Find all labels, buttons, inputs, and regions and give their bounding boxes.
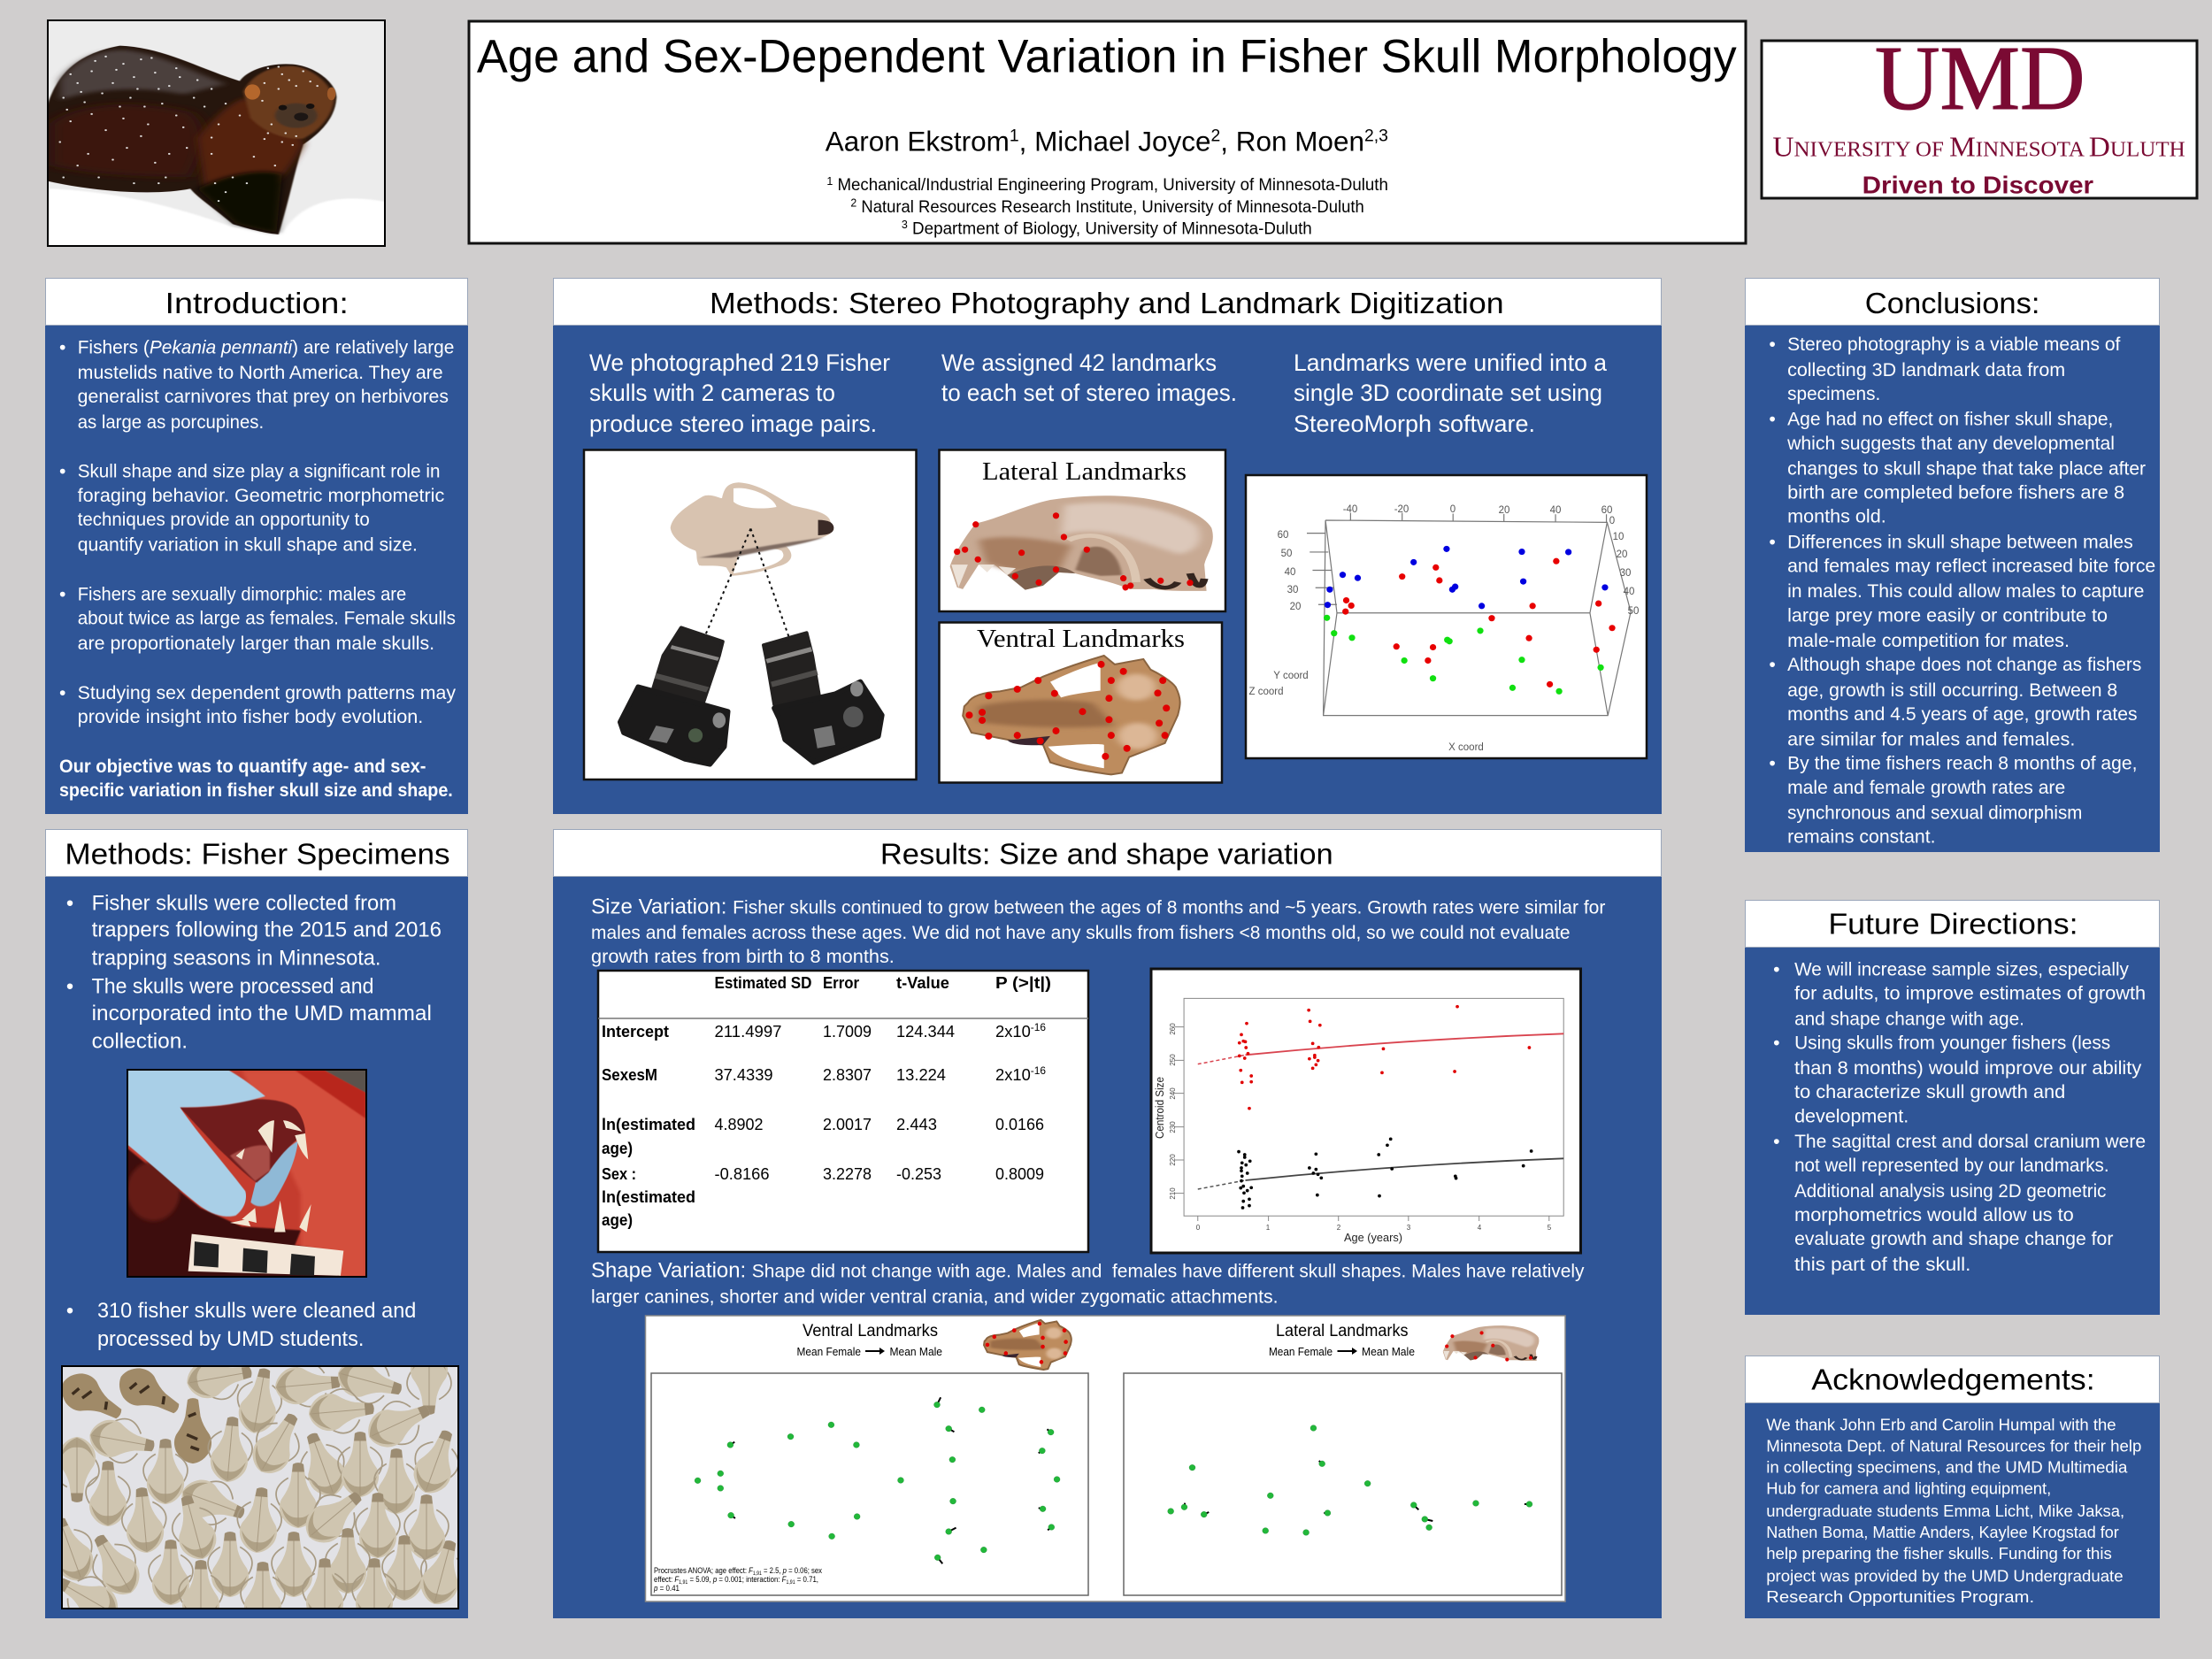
text block: introduction bullets: Our objective was to quantify age- and sex- (59, 757, 426, 777)
chart: 3D landmark coordinates: Z coord (1249, 687, 1283, 697)
chart: 3D landmark coordinates: 40 (1624, 587, 1634, 597)
photo: gloved hand holding fisher jaw (127, 1069, 367, 1279)
table: model coefficients: ln(estimated (602, 1187, 695, 1206)
logo: UMD: Driven to Discover (1863, 171, 2093, 198)
table: model coefficients: Sex : (602, 1164, 636, 1183)
panel: Conclusions (1745, 278, 2160, 852)
chart: 3D landmark coordinates (1246, 475, 1647, 758)
text block: Procrustes ANOVA: 1,91 (679, 1580, 688, 1586)
heading: Methods Fisher Specimens: Methods: Fisher Specimens (65, 839, 450, 872)
table: model coefficients: age) (602, 1139, 633, 1157)
table: model coefficients (598, 971, 1088, 1252)
affiliations: Natural Resources Research Institute, University of Minnesota-Duluth (856, 198, 1364, 217)
chart: 3D landmark coordinates: -40 (1343, 504, 1357, 515)
text block: Procrustes ANOVA: effect: F (654, 1575, 680, 1584)
chart: 3D landmark coordinates: 20 (1617, 549, 1627, 560)
text block: Procrustes ANOVA: p = 0.001; interaction: F (713, 1575, 789, 1584)
authors: 1 (1010, 127, 1019, 145)
legend: ventral mean female to mean male: Mean Female (796, 1345, 861, 1358)
chart: 3D landmark coordinates: 30 (1620, 568, 1631, 579)
panel: Methods Stereo Photography (553, 278, 1662, 814)
heading: Introduction: Introduction: (165, 288, 349, 320)
text block: future directions bullets: for adults, to improve estimates of growth (1794, 984, 2146, 1004)
text block: future directions bullets: • (1773, 960, 1780, 980)
table: model coefficients: 2x10 (995, 1065, 1031, 1084)
chart: 3D landmark coordinates: 60 (1278, 530, 1288, 541)
text block: specimen bullets: 310 fisher skulls were cleaned and (97, 1299, 416, 1322)
text block: step three: Landmarks were unified into a (1294, 349, 1607, 376)
logo: UMD: UNIVERSITY OF MINNESOTA DULUTH (1772, 132, 2185, 163)
image: ventral landmarks: Ventral Landmarks (977, 625, 1185, 653)
icon: small lateral skull (1443, 1325, 1539, 1362)
text block: step three (1294, 349, 1607, 437)
chart: 3D landmark coordinates: 30 (1287, 585, 1298, 595)
text block: size variation (591, 895, 1605, 967)
text block: acknowledgements: Hub for camera and lighting equipment, (1766, 1479, 2051, 1497)
text block: future directions bullets: to characterize skull growth and (1794, 1082, 2065, 1102)
text block: introduction bullets: mustelids native to North America. They are (78, 363, 443, 383)
panel: Acknowledgements (1745, 1356, 2160, 1618)
text block: conclusions bullets: • (1769, 334, 1776, 355)
text block: specimen bullets: Fisher skulls were collected from (92, 891, 396, 914)
table: model coefficients: 4.8902 (715, 1115, 763, 1133)
chart: 3D landmark coordinates: 0 (1450, 504, 1455, 515)
affiliations: Mechanical/Industrial Engineering Program, University of Minnesota-Duluth (833, 176, 1388, 195)
text block: size variation: males and females across these ages. We did not have any skulls from fishers <8 months old, so we could not evaluate (591, 923, 1571, 943)
text block: conclusions bullets: • (1769, 532, 1776, 552)
figure: mean shape comparison (646, 1316, 1565, 1601)
text block: conclusions bullets: Differences in skull shape between males (1787, 532, 2133, 552)
chart: centroid size by age (1151, 969, 1580, 1253)
text block: conclusions bullets: Stereo photography is a viable means of (1787, 334, 2120, 355)
plot: lateral landmark shifts (1124, 1373, 1562, 1595)
text block: step one: We photographed 219 Fisher (589, 349, 890, 376)
chart: 3D landmark coordinates: 50 (1628, 606, 1639, 617)
text block: introduction bullets: are proportionately larger than male skulls. (78, 634, 434, 654)
legend: lateral mean female to mean male: Mean Female (1269, 1345, 1333, 1358)
text block: introduction bullets: quantify variation in skull shape and size. (78, 535, 418, 556)
table: model coefficients: -16 (1031, 1064, 1046, 1077)
text block: step two (941, 349, 1237, 406)
text block: introduction bullets: provide insight into fisher body evolution. (78, 707, 423, 727)
table: model coefficients: Estimated SD (715, 973, 812, 992)
text block: conclusions bullets: age, growth is still occurring. Between 8 (1787, 680, 2117, 701)
text block: conclusions bullets: birth are completed before fishers are 8 (1787, 483, 2124, 503)
text block: acknowledgements: Nathen Boma, Mattie Anders, Kaylee Krogstad for (1766, 1523, 2119, 1541)
chart: 3D landmark coordinates: 50 (1281, 549, 1292, 559)
chart: centroid size by age: 220 (1169, 1154, 1177, 1166)
table: model coefficients: 211.4997 (715, 1022, 782, 1041)
text block: Procrustes ANOVA: Procrustes ANOVA; age effect: F (654, 1566, 763, 1575)
text block: conclusions bullets (1769, 334, 2155, 848)
table: model coefficients: 3.2278 (823, 1164, 872, 1183)
text block: acknowledgements: We thank John Erb and Carolin Humpal with the (1766, 1416, 2116, 1434)
chart: centroid size by age: Age (years) (1344, 1231, 1402, 1244)
table: model coefficients: 124.344 (896, 1022, 955, 1041)
legend: lateral mean female to mean male (1269, 1345, 1415, 1358)
text block: acknowledgements: Minnesota Dept. of Natural Resources for their help (1766, 1437, 2141, 1455)
text block: acknowledgements: Research Opportunities Program. (1766, 1587, 2034, 1606)
table: model coefficients: 1.7009 (823, 1022, 872, 1041)
text block: future directions bullets: The sagittal crest and dorsal cranium were (1794, 1132, 2146, 1152)
table: model coefficients: -16 (1031, 1021, 1046, 1033)
text block: future directions bullets: not well represented by our landmarks. (1794, 1156, 2109, 1176)
title: Age and Sex-Dependent Variation in Fisher Skull Morphology (477, 30, 1737, 82)
chart: 3D landmark coordinates: 10 (1613, 532, 1624, 542)
chart: 3D landmark coordinates: Y coord (1273, 671, 1309, 681)
authors: Aaron Ekstrom (826, 127, 1007, 157)
text block: acknowledgements: help preparing the fisher skulls. Funding for this (1766, 1544, 2112, 1563)
text block: conclusions bullets: months and 4.5 years of age, growth rates (1787, 704, 2138, 725)
chart: 3D landmark coordinates: 40 (1285, 567, 1295, 578)
text block: conclusions bullets: months old. (1787, 507, 1886, 527)
text block: shape variation: Shape Variation: Shape did not change with age. Males and females have different skull shapes. Males have relatively (591, 1259, 1585, 1283)
table: model coefficients: 0.0166 (995, 1115, 1044, 1133)
text block: introduction bullets: • (59, 337, 65, 357)
legend: ventral mean female to mean male: Mean Male (890, 1345, 942, 1358)
affiliations: 3 (902, 218, 908, 231)
table: model coefficients: SexesM (602, 1065, 657, 1084)
text block: specimen bullets: incorporated into the UMD mammal (92, 1002, 432, 1025)
legend: ventral mean female to mean male (796, 1345, 942, 1358)
text block: Procrustes ANOVA (653, 1566, 822, 1593)
chart: centroid size by age: 230 (1169, 1121, 1177, 1133)
text block: introduction bullets: • (59, 462, 65, 482)
logo: UMD: UMD (1875, 28, 2085, 129)
authors: 2,3 (1364, 127, 1388, 145)
text block: conclusions bullets: By the time fishers reach 8 months of age, (1787, 754, 2138, 774)
text block: conclusions bullets: • (1769, 655, 1776, 675)
text block: step two: We assigned 42 landmarks (941, 349, 1217, 376)
text block: Procrustes ANOVA: 1,91 (753, 1571, 762, 1577)
table: model coefficients: 37.4339 (715, 1065, 773, 1084)
icon: small ventral skull (984, 1320, 1071, 1370)
heading: Future Directions: Future Directions: (1828, 908, 2078, 941)
affiliations: Department of Biology, University of Minnesota-Duluth (908, 219, 1312, 238)
text block: introduction bullets: • (59, 584, 65, 604)
authors: 2 (1210, 127, 1220, 145)
image: ventral landmarks (940, 623, 1222, 782)
heading: Results: Results: Size and shape variation (880, 839, 1333, 872)
chart: centroid size by age: 2 (1337, 1224, 1341, 1232)
text block: Procrustes ANOVA: 1,91 (786, 1580, 795, 1586)
chart: 3D landmark coordinates: -20 (1394, 504, 1409, 515)
panel: Future Directions (1745, 901, 2160, 1315)
text block: future directions bullets: Using skulls from younger fishers (less (1794, 1033, 2110, 1053)
text block: introduction bullets: generalist carnivores that prey on herbivores (78, 387, 449, 407)
text block: specimen bullets (66, 891, 442, 1350)
text block: introduction bullets: Skull shape and size play a significant role in (78, 462, 440, 482)
affiliations (826, 174, 1388, 238)
text block: conclusions bullets: and females may reflect increased bite force (1787, 557, 2155, 577)
chart: centroid size by age: 0 (1196, 1224, 1201, 1232)
chart: 3D landmark coordinates: 20 (1290, 602, 1301, 612)
table: model coefficients: t-Value (896, 973, 949, 992)
heading: Acknowledgements: Acknowledgements: (1811, 1363, 2095, 1396)
table: model coefficients: Intercept (602, 1022, 669, 1041)
text block: conclusions bullets: collecting 3D landmark data from (1787, 360, 2065, 380)
table: model coefficients: 0.8009 (995, 1164, 1044, 1183)
image: lateral landmarks: Lateral Landmarks (982, 457, 1187, 486)
table: model coefficients: ln(estimated (602, 1115, 695, 1133)
text block: conclusions bullets: in males. This could allow males to capture (1787, 581, 2144, 602)
table: model coefficients: 2.8307 (823, 1065, 872, 1084)
text block: introduction bullets: techniques provide an opportunity to (78, 510, 370, 530)
table: model coefficients: 13.224 (896, 1065, 946, 1084)
text block: Procrustes ANOVA: = 0.71, (795, 1575, 818, 1584)
text block: specimen bullets: collection. (92, 1030, 188, 1053)
chart: 3D landmark coordinates: 40 (1550, 505, 1561, 516)
text block: introduction bullets: Studying sex dependent growth patterns may (78, 683, 456, 703)
text block: future directions bullets: evaluate growth and shape change for (1794, 1229, 2113, 1249)
heading: lateral landmarks: Lateral Landmarks (1276, 1322, 1409, 1340)
chart: 3D landmark coordinates: 60 (1601, 505, 1612, 516)
panel: Results (553, 830, 1662, 1618)
text block: conclusions bullets: changes to skull shape that take place after (1787, 459, 2146, 480)
table: model coefficients: -0.253 (896, 1164, 941, 1183)
chart: centroid size by age: 210 (1169, 1187, 1177, 1200)
table: model coefficients: 2.443 (896, 1115, 937, 1133)
affiliations: 1 (826, 174, 833, 188)
text block: step three: single 3D coordinate set using (1294, 380, 1602, 406)
text block: step three: StereoMorph software. (1294, 411, 1535, 437)
text block: acknowledgements (1766, 1416, 2141, 1606)
text block: acknowledgements: undergraduate students Emma Licht, Mike Jaksa, (1766, 1502, 2124, 1520)
text block: introduction bullets: foraging behavior. Geometric morphometric (78, 486, 445, 506)
text block: conclusions bullets: Age had no effect on fisher skull shape, (1787, 410, 2113, 430)
chart: 3D landmark coordinates: X coord (1448, 742, 1484, 753)
text block: introduction bullets: • (59, 683, 65, 703)
chart: centroid size by age: 4 (1478, 1224, 1482, 1232)
panel: Introduction (45, 278, 468, 814)
text block: conclusions bullets: male and female growth rates are (1787, 778, 2065, 798)
chart: 3D landmark coordinates: 0 (1609, 516, 1615, 526)
image: lateral landmarks (940, 449, 1225, 611)
text block: conclusions bullets: • (1769, 754, 1776, 774)
text block: future directions bullets: • (1773, 1132, 1780, 1152)
text block: conclusions bullets: are similar for males and females. (1787, 730, 2075, 750)
table: model coefficients: 2x10 (995, 1022, 1031, 1041)
table: model coefficients: Error (823, 973, 859, 992)
chart: 3D landmark coordinates: 20 (1499, 505, 1509, 516)
heading: Conclusions: Conclusions: (1865, 288, 2040, 320)
text block: step one (589, 349, 890, 437)
text block: future directions bullets: Additional analysis using 2D geometric (1794, 1181, 2107, 1202)
chart: centroid size by age: 240 (1169, 1087, 1177, 1100)
text block: step one: skulls with 2 cameras to (589, 380, 835, 406)
text block: conclusions bullets: specimens. (1787, 384, 1880, 404)
text block: specimen bullets: • (66, 1299, 73, 1322)
text block: size variation: Size Variation: Fisher skulls continued to grow between the ages of 8 months and ~5 years. Growth rates were similar for (591, 895, 1605, 918)
chart: centroid size by age: 5 (1548, 1224, 1552, 1232)
chart: centroid size by age: 1 (1266, 1224, 1271, 1232)
text block: future directions bullets: and shape change with age. (1794, 1009, 2024, 1029)
affiliations: 2 (850, 196, 856, 210)
text block: Procrustes ANOVA: p = 0.06; sex (783, 1566, 828, 1575)
text block: Procrustes ANOVA: = 2.5, (762, 1566, 783, 1575)
legend: lateral mean female to mean male: Mean Male (1362, 1345, 1415, 1358)
authors: , Ron Moen (1220, 127, 1364, 157)
text block: size variation: growth rates from birth to 8 months. (591, 947, 895, 967)
text block: conclusions bullets: • (1769, 410, 1776, 430)
text block: specimen bullets: • (66, 974, 73, 997)
text block: introduction bullets: Fishers (Pekania pennanti) are relatively large (78, 337, 454, 357)
text block: conclusions bullets: synchronous and sexual dimorphism (1787, 803, 2082, 824)
chart: centroid size by age: 3 (1407, 1224, 1411, 1232)
text block: future directions bullets: this part of the skull. (1794, 1255, 1970, 1275)
text block: conclusions bullets: male-male competition for mates. (1787, 631, 2070, 651)
heading: Methods Stereo: Methods: Stereo Photography and Landmark Digitization (710, 288, 1504, 320)
chart: centroid size by age: Centroid Size (1153, 1077, 1166, 1139)
text block: conclusions bullets: remains constant. (1787, 827, 1936, 848)
text block: conclusions bullets: large prey more easily or contribute to (1787, 605, 2108, 626)
text block: step one: produce stereo image pairs. (589, 411, 877, 437)
logo: UMD (1762, 28, 2197, 198)
chart: centroid size by age: 250 (1169, 1054, 1177, 1066)
text block: introduction bullets (59, 337, 456, 801)
text block: specimen bullets: trapping seasons in Minnesota. (92, 947, 380, 970)
text block: conclusions bullets: Although shape does not change as fishers (1787, 655, 2141, 675)
table: model coefficients: -0.8166 (715, 1164, 770, 1183)
table: model coefficients: 2.0017 (823, 1115, 872, 1133)
text block: specimen bullets: trappers following the 2015 and 2016 (92, 918, 442, 941)
text block: future directions bullets: morphometrics would allow us to (1794, 1205, 2074, 1225)
table: model coefficients: P (>|t|) (995, 973, 1051, 992)
plot: ventral landmark shifts (651, 1373, 1088, 1595)
text block: introduction bullets: as large as porcupines. (78, 412, 264, 433)
text block: step two: to each set of stereo images. (941, 380, 1237, 406)
panel: Methods Fisher Specimens (39, 830, 472, 1634)
text block: specimen bullets: The skulls were processed and (92, 974, 374, 997)
text block: introduction bullets: specific variation in fisher skull size and shape. (59, 780, 453, 801)
text block: Procrustes ANOVA: = 5.09, (687, 1575, 713, 1584)
table: model coefficients: age) (602, 1210, 633, 1229)
text block: future directions bullets: than 8 months) would improve our ability (1794, 1058, 2142, 1079)
text block: Procrustes ANOVA: p = 0.41 (653, 1584, 680, 1593)
text block: future directions bullets: We will increase sample sizes, especially (1794, 960, 2129, 980)
photo: tray of cleaned fisher skulls (61, 1365, 459, 1609)
text block: acknowledgements: in collecting specimens, and the UMD Multimedia (1766, 1458, 2128, 1477)
text block: specimen bullets: • (66, 891, 73, 914)
text block: future directions bullets (1773, 960, 2146, 1275)
text block: introduction bullets: Fishers are sexually dimorphic: males are (78, 584, 406, 604)
chart: centroid size by age: 260 (1169, 1023, 1177, 1035)
title box (469, 21, 1746, 243)
authors: , Michael Joyce (1019, 127, 1210, 157)
photo: fisher in snow (47, 19, 386, 247)
text block: conclusions bullets: which suggests that any developmental (1786, 434, 2115, 454)
text block: shape variation: larger canines, shorter and wider ventral crania, and wider zygomatic attachments. (591, 1286, 1279, 1307)
text block: acknowledgements: project was provided by the UMD Undergraduate (1766, 1566, 2124, 1585)
text block: introduction bullets: about twice as large as females. Female skulls (78, 609, 456, 629)
text block: shape variation (591, 1259, 1585, 1307)
text block: future directions bullets: development. (1794, 1106, 1909, 1126)
heading: ventral landmarks: Ventral Landmarks (803, 1322, 938, 1340)
text block: specimen bullets: processed by UMD students. (97, 1327, 364, 1350)
text block: future directions bullets: • (1773, 1033, 1780, 1053)
image: stereo camera setup (584, 449, 917, 780)
